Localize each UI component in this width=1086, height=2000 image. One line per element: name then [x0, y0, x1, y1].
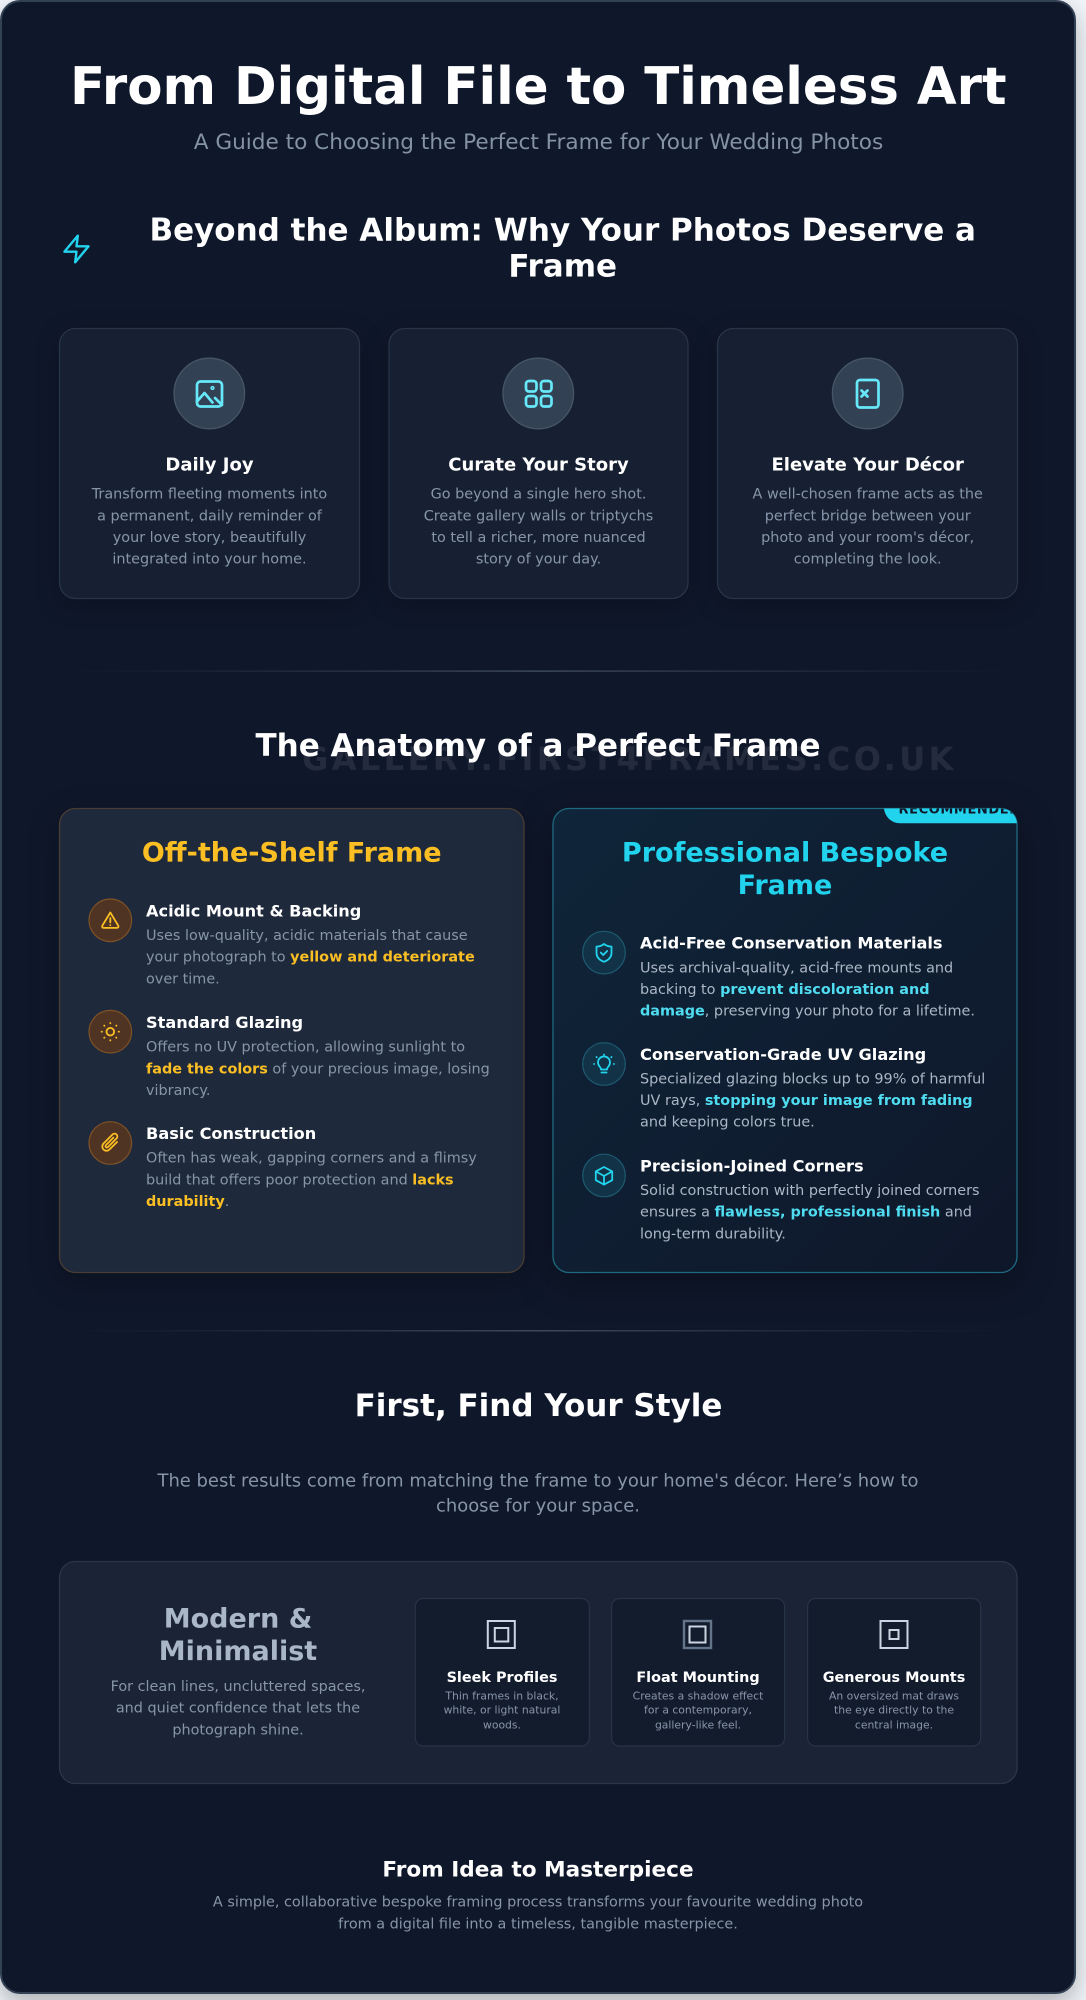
item: acidic mount: Uses low-quality, acidic materials that cause	[146, 928, 468, 944]
panel: elevate your decor: photo and your room's décor,	[761, 530, 974, 546]
item: standard glazing: Offers no UV protection, allowing sunlight to	[146, 1040, 465, 1056]
card: float mounting	[612, 1598, 785, 1746]
heading: beyond the album: Beyond the Album: Why Your Photos Deserve a	[149, 213, 976, 249]
item: basic construction	[89, 1122, 477, 1210]
panel: curate your story: Create gallery walls or triptychs	[424, 508, 653, 524]
item: precision-joined corners: Solid construction with perfectly joined corners	[640, 1183, 980, 1199]
item: acid-free materials: backing to prevent discoloration and	[640, 982, 930, 998]
card: float mounting: gallery-like feel.	[655, 1718, 741, 1731]
panel: off-the-shelf frame	[60, 808, 524, 1272]
panel: curate your story: Go beyond a single hero shot.	[431, 487, 646, 503]
card: float mounting: Creates a shadow effect	[633, 1689, 763, 1702]
item: precision-joined corners: long-term durability.	[640, 1226, 786, 1242]
panel: elevate your decor: completing the look.	[794, 552, 942, 568]
card: generous mounts	[808, 1598, 981, 1746]
panel: curate your story: Curate Your Story	[448, 455, 629, 476]
item: acidic mount: your photograph to yellow and deteriorate	[146, 950, 475, 966]
description: modern: For clean lines, uncluttered spaces,	[111, 1679, 365, 1695]
item: basic construction: Often has weak, gapping corners and a flimsy	[146, 1151, 477, 1167]
description: modern: photograph shine.	[172, 1722, 304, 1738]
card: generous mounts: central image.	[855, 1718, 933, 1731]
card: sleek profiles: woods.	[483, 1718, 521, 1731]
card: generous mounts: An oversized mat draws	[829, 1689, 959, 1702]
heading: modern and minimalist: Modern &	[164, 1604, 312, 1635]
subtitle: A Guide to Choosing the Perfect Frame for Your Wedding Photos	[194, 130, 883, 155]
panel: daily joy: Transform fleeting moments into	[91, 487, 327, 503]
item: standard glazing: vibrancy.	[146, 1083, 210, 1099]
item: uv glazing	[583, 1043, 985, 1131]
panel: daily joy: your love story, beautifully	[113, 530, 307, 546]
watermark: GALLERY.FIRST4FRAMES.CO.UK	[302, 740, 957, 778]
heading: beyond the album: Frame	[508, 249, 617, 285]
item: basic construction: Basic Construction	[146, 1124, 316, 1143]
card: sleek profiles: Thin frames in black,	[444, 1689, 559, 1702]
heading: professional bespoke: Professional Bespoke	[622, 838, 948, 869]
heading: first find your style: First, Find Your Style	[355, 1388, 722, 1424]
intro text: choose for your space.	[436, 1496, 640, 1517]
item: uv glazing: and keeping colors true.	[640, 1115, 815, 1131]
intro text: The best results come from matching the frame to your home's décor. Here’s how to	[156, 1471, 919, 1492]
panel: elevate your decor: A well-chosen frame acts as the	[753, 487, 983, 503]
panel: curate your story	[389, 328, 688, 598]
card: float mounting: for a contemporary,	[644, 1704, 752, 1717]
icon: lightning bolt	[64, 236, 88, 262]
item: uv glazing: Specialized glazing blocks up to 99% of harmful	[640, 1071, 985, 1087]
panel: daily joy	[60, 328, 360, 598]
item: standard glazing	[89, 1010, 490, 1099]
heading: from idea to masterpiece: From Idea to Masterpiece	[382, 1858, 694, 1883]
item: acid-free materials: Uses archival-quality, acid-free mounts and	[640, 960, 953, 976]
item: uv glazing: UV rays, stopping your image from fading	[640, 1093, 973, 1109]
item: acidic mount: over time.	[146, 971, 220, 987]
panel: daily joy: a permanent, daily reminder of	[97, 508, 323, 524]
heading: anatomy of a perfect frame: The Anatomy of a Perfect Frame	[256, 728, 820, 764]
footer text: from a digital file into a timeless, tangible masterpiece.	[338, 1916, 738, 1932]
heading: professional bespoke: Frame	[738, 870, 832, 901]
item: precision-joined corners	[583, 1154, 980, 1242]
heading: off-the-shelf: Off-the-Shelf Frame	[142, 838, 442, 869]
item: basic construction: build that offers poor protection and lacks	[146, 1172, 454, 1188]
panel: curate your story: story of your day.	[476, 552, 601, 568]
item: acid-free materials	[583, 931, 975, 1020]
card: sleek profiles: Sleek Profiles	[447, 1670, 557, 1686]
card: generous mounts: the eye directly to the	[834, 1704, 954, 1717]
heading: modern and minimalist: Minimalist	[159, 1636, 317, 1667]
item: standard glazing: Standard Glazing	[146, 1013, 303, 1032]
panel: curate your story: to tell a richer, more nuanced	[431, 530, 646, 546]
panel: elevate your decor: perfect bridge between your	[765, 508, 971, 524]
card: sleek profiles	[415, 1598, 589, 1746]
badge: recommended	[884, 808, 1017, 824]
title: From Digital File to Timeless Art	[70, 57, 1007, 117]
panel: professional bespoke frame	[553, 802, 1021, 1272]
panel: daily joy: integrated into your home.	[112, 552, 307, 568]
item: basic construction: durability.	[146, 1194, 229, 1210]
panel: elevate your decor	[718, 328, 1018, 598]
item: precision-joined corners: ensures a flawless, professional finish and	[640, 1205, 972, 1221]
item: precision-joined corners: Precision-Joined Corners	[640, 1156, 864, 1175]
card: sleek profiles: white, or light natural	[444, 1704, 560, 1717]
description: modern: and quiet confidence that lets the	[116, 1701, 360, 1717]
item: acidic mount	[89, 899, 475, 987]
card: generous mounts: Generous Mounts	[823, 1670, 965, 1686]
item: acidic mount: Acidic Mount & Backing	[146, 902, 361, 921]
item: acid-free materials: damage, preserving your photo for a lifetime.	[640, 1004, 975, 1020]
card: float mounting: Float Mounting	[636, 1670, 760, 1686]
panel: elevate your decor: Elevate Your Décor	[771, 455, 964, 476]
item: uv glazing: Conservation-Grade UV Glazing	[640, 1045, 926, 1064]
panel: modern and minimalist	[60, 1562, 1017, 1784]
badge: recommended: RECOMMENDED	[898, 802, 1021, 818]
panel: daily joy: Daily Joy	[165, 455, 254, 476]
item: standard glazing: fade the colors of your precious image, losing	[146, 1061, 490, 1077]
item: acid-free materials: Acid-Free Conservation Materials	[640, 933, 943, 952]
footer text: A simple, collaborative bespoke framing process transforms your favourite wedding photo	[213, 1895, 863, 1911]
